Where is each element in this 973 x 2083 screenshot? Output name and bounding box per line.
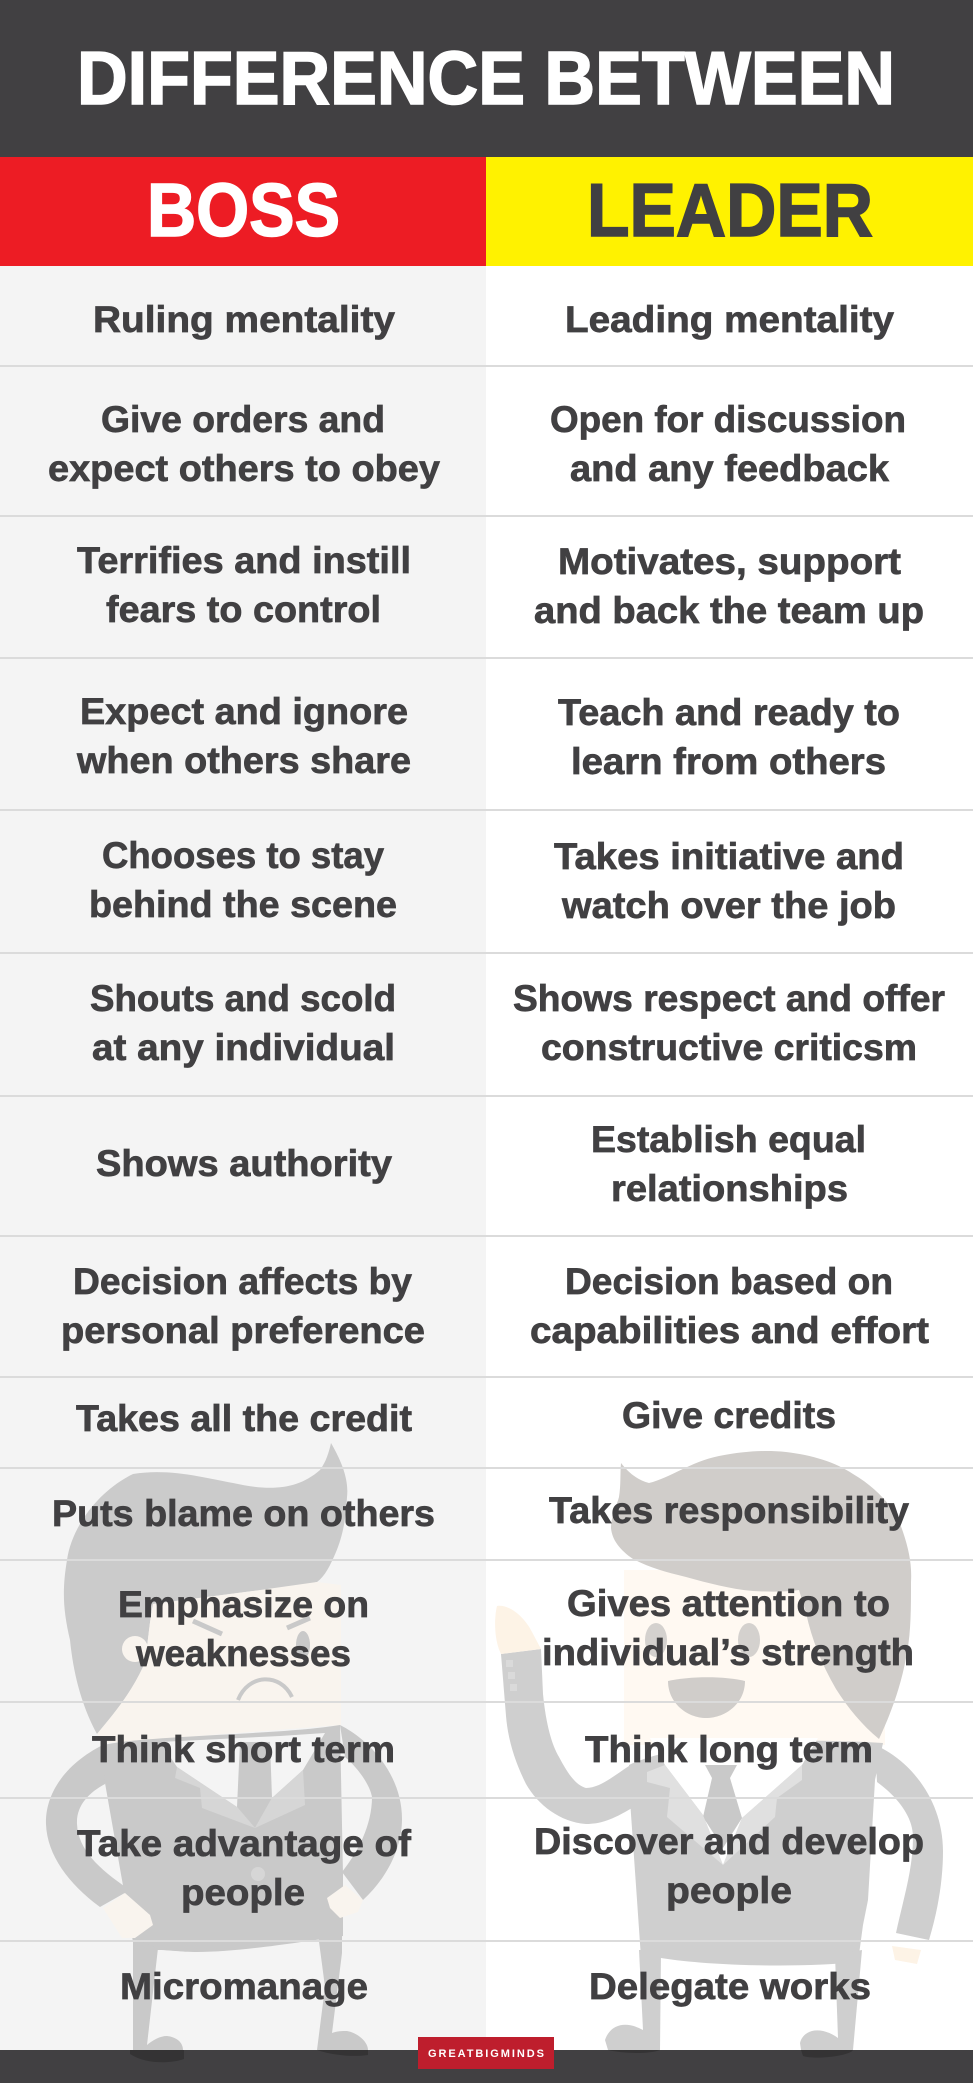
trait: individual strength: Gives attention to: [567, 1583, 890, 1624]
left column background: [0, 266, 486, 2056]
trait: equal relationships: Establish equal: [591, 1119, 866, 1160]
trait: motivates: [534, 541, 924, 631]
trait: shouts: [90, 978, 396, 1068]
trait: teach and learn: Teach and ready to: [558, 692, 900, 733]
trait: short term: Think short term: [92, 1729, 395, 1770]
trait: stays behind: [89, 835, 397, 925]
trait: take advantage: Take advantage of: [77, 1823, 412, 1864]
trait: decision based: [530, 1261, 929, 1351]
trait: expect and ignore: [76, 691, 411, 781]
trait: stays behind: Chooses to stay: [102, 835, 384, 876]
trait: expect and ignore: Expect and ignore: [80, 691, 408, 732]
trait: motivates: and back the team up: [534, 590, 924, 631]
trait: stays behind: behind the scene: [89, 884, 397, 925]
trait: individual strength: [542, 1583, 914, 1673]
panel: boss traits: [48, 299, 440, 2007]
trait: teach and learn: [558, 692, 900, 782]
trait: discover and develop: people: [666, 1870, 792, 1911]
trait: puts blame: Puts blame on others: [52, 1493, 435, 1534]
trait: leading mentality: Leading mentality: [565, 299, 894, 340]
trait: decision affects: personal preference: [61, 1310, 425, 1351]
trait: takes credit: Takes all the credit: [76, 1398, 412, 1439]
illustration: leader figure: [495, 1451, 943, 2058]
title banner: [0, 0, 973, 157]
trait: decision based: capabilities and effort: [530, 1310, 929, 1351]
title banner: DIFFERENCE BETWEEN: [77, 36, 895, 120]
logo badge: GREATBIGMINDS: [428, 2048, 544, 2060]
trait: open for discussion: [550, 399, 906, 489]
trait: long term: Think long term: [585, 1729, 873, 1770]
trait: give orders: expect others to obey: [48, 448, 440, 489]
trait: shouts: at any individual: [92, 1027, 395, 1068]
trait: give orders: Give orders and: [101, 399, 385, 440]
trait: micromanage: Micromanage: [120, 1966, 368, 2007]
trait: give credits: Give credits: [622, 1395, 836, 1436]
trait: emphasize weaknesses: [118, 1584, 369, 1674]
illustration: boss figure: [46, 1443, 402, 2062]
trait: emphasize weaknesses: Emphasize on: [118, 1584, 369, 1625]
trait: equal relationships: [591, 1119, 866, 1209]
trait: motivates: Motivates, support: [558, 541, 901, 582]
right column background: [486, 266, 973, 2056]
heading: boss: BOSS: [147, 168, 340, 252]
trait: takes initiative: [554, 836, 904, 926]
footer bar: [0, 2050, 973, 2083]
trait: terrifies: [77, 540, 411, 630]
trait: takes responsibility: Takes responsibility: [549, 1490, 909, 1531]
heading: boss: [0, 157, 486, 266]
trait: emphasize weaknesses: weaknesses: [135, 1633, 351, 1674]
trait: shows respect: constructive criticsm: [541, 1027, 917, 1068]
trait: shouts: Shouts and scold: [90, 978, 396, 1019]
trait: open for discussion: Open for discussion: [550, 399, 906, 440]
logo badge: [418, 2037, 554, 2069]
trait: expect and ignore: when others share: [76, 740, 411, 781]
trait: discover and develop: Discover and develop: [534, 1821, 924, 1862]
trait: equal relationships: relationships: [611, 1168, 848, 1209]
trait: decision based: Decision based on: [565, 1261, 893, 1302]
trait: give orders: [48, 399, 440, 489]
trait: open for discussion: and any feedback: [570, 448, 889, 489]
trait: shows authority: Shows authority: [96, 1143, 392, 1184]
panel: leader traits: [513, 299, 945, 2007]
trait: takes initiative: watch over the job: [561, 885, 896, 926]
trait: ruling mentality: Ruling mentality: [93, 299, 395, 340]
trait: teach and learn: learn from others: [571, 741, 886, 782]
trait: shows respect: Shows respect and offer: [513, 978, 945, 1019]
trait: takes initiative: Takes initiative and: [554, 836, 904, 877]
trait: terrifies: Terrifies and instill: [77, 540, 411, 581]
trait: discover and develop: [534, 1821, 924, 1911]
trait: individual strength: individual’s strength: [542, 1632, 914, 1673]
trait: terrifies: fears to control: [106, 589, 381, 630]
trait: delegate works: Delegate works: [589, 1966, 871, 2007]
heading: leader: [486, 157, 973, 266]
heading: leader: LEADER: [587, 168, 873, 252]
trait: decision affects: [61, 1261, 425, 1351]
trait: take advantage: [77, 1823, 412, 1913]
trait: take advantage: people: [181, 1872, 305, 1913]
trait: shows respect: [513, 978, 945, 1068]
trait: decision affects: Decision affects by: [73, 1261, 412, 1302]
